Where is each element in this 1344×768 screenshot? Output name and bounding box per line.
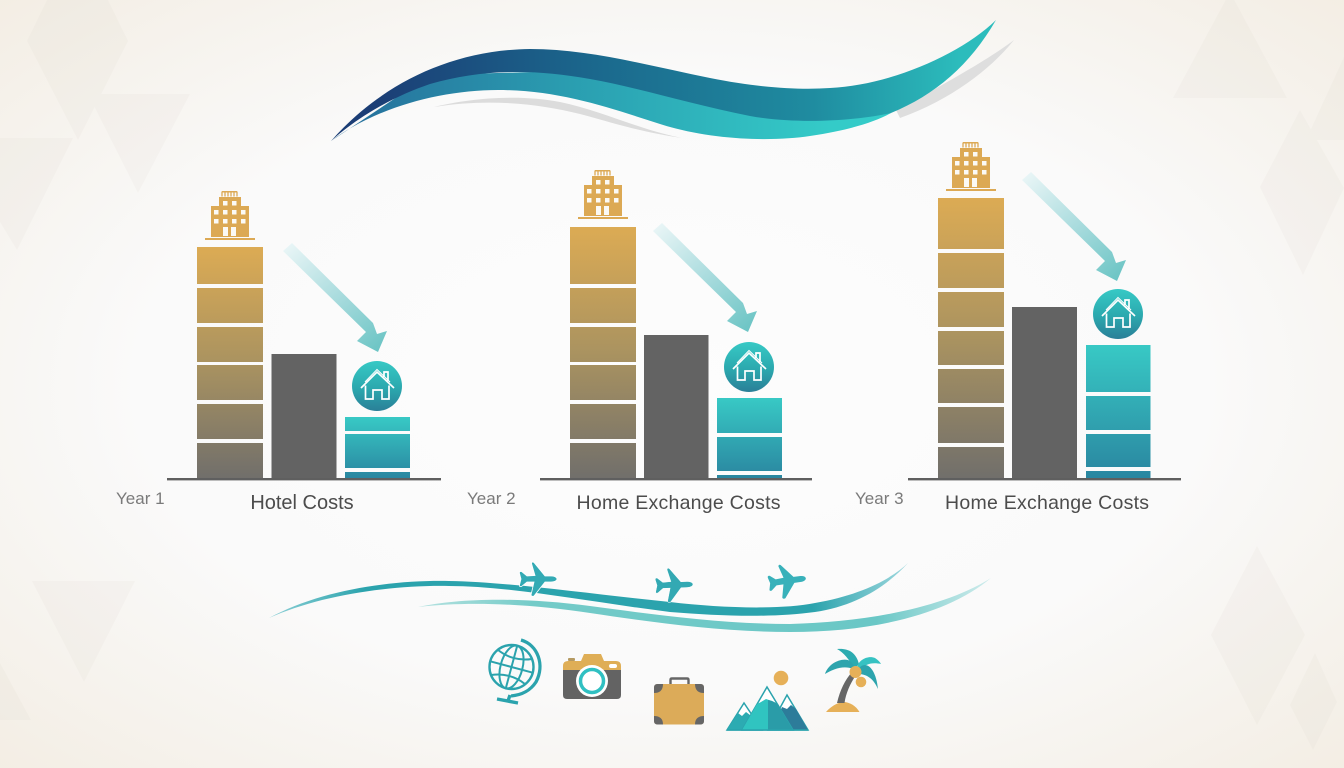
icon: plane 1 (519, 562, 557, 596)
home exchange bar (345, 417, 410, 478)
comparison bar (272, 354, 336, 478)
travel icons (485, 640, 881, 730)
year label: Year 3 (855, 489, 904, 508)
icon: house (352, 361, 402, 411)
axis label: Hotel Costs (250, 492, 354, 514)
wave shadow: left (434, 98, 682, 138)
icon: suitcase (654, 678, 704, 724)
home exchange bar (1086, 345, 1150, 478)
flight path swooshes (269, 561, 991, 632)
icon: house (1093, 289, 1143, 339)
wave light band (331, 70, 891, 141)
chart: Year 3 (855, 142, 1181, 514)
chart: Year 1 (116, 191, 441, 514)
icon: globe (485, 640, 540, 703)
dark swoosh (269, 563, 908, 618)
year label: Year 1 (116, 489, 165, 508)
hotel cost bar (570, 227, 636, 478)
top wave banner (331, 20, 1014, 141)
wave shadow: right (896, 40, 1014, 118)
wave dark band (331, 20, 996, 141)
axis label: Home Exchange Costs (945, 492, 1149, 514)
home exchange bar (717, 398, 782, 478)
comparison bar (644, 335, 708, 478)
icon: hotel (205, 191, 255, 240)
axis label: Home Exchange Costs (576, 492, 781, 514)
comparison bar (1012, 307, 1077, 478)
icon: plane 2 (655, 567, 694, 603)
icon: camera (563, 654, 621, 699)
year label: Year 2 (467, 489, 516, 508)
icon: palm tree (825, 649, 881, 712)
arrow (1022, 172, 1126, 281)
baseline (540, 478, 812, 480)
hotel cost bar (197, 247, 263, 478)
hotel cost bar (938, 198, 1004, 478)
chart: Year 2 (467, 170, 812, 514)
icon: hotel (578, 170, 628, 219)
icon: plane 3 (766, 561, 808, 601)
arrow (283, 243, 387, 352)
baseline (908, 478, 1181, 480)
arrow (653, 223, 757, 332)
icon: house (724, 342, 774, 392)
icon: mountains (727, 671, 808, 730)
icon: hotel (946, 142, 996, 191)
baseline (167, 478, 441, 480)
light swoosh (418, 578, 991, 632)
